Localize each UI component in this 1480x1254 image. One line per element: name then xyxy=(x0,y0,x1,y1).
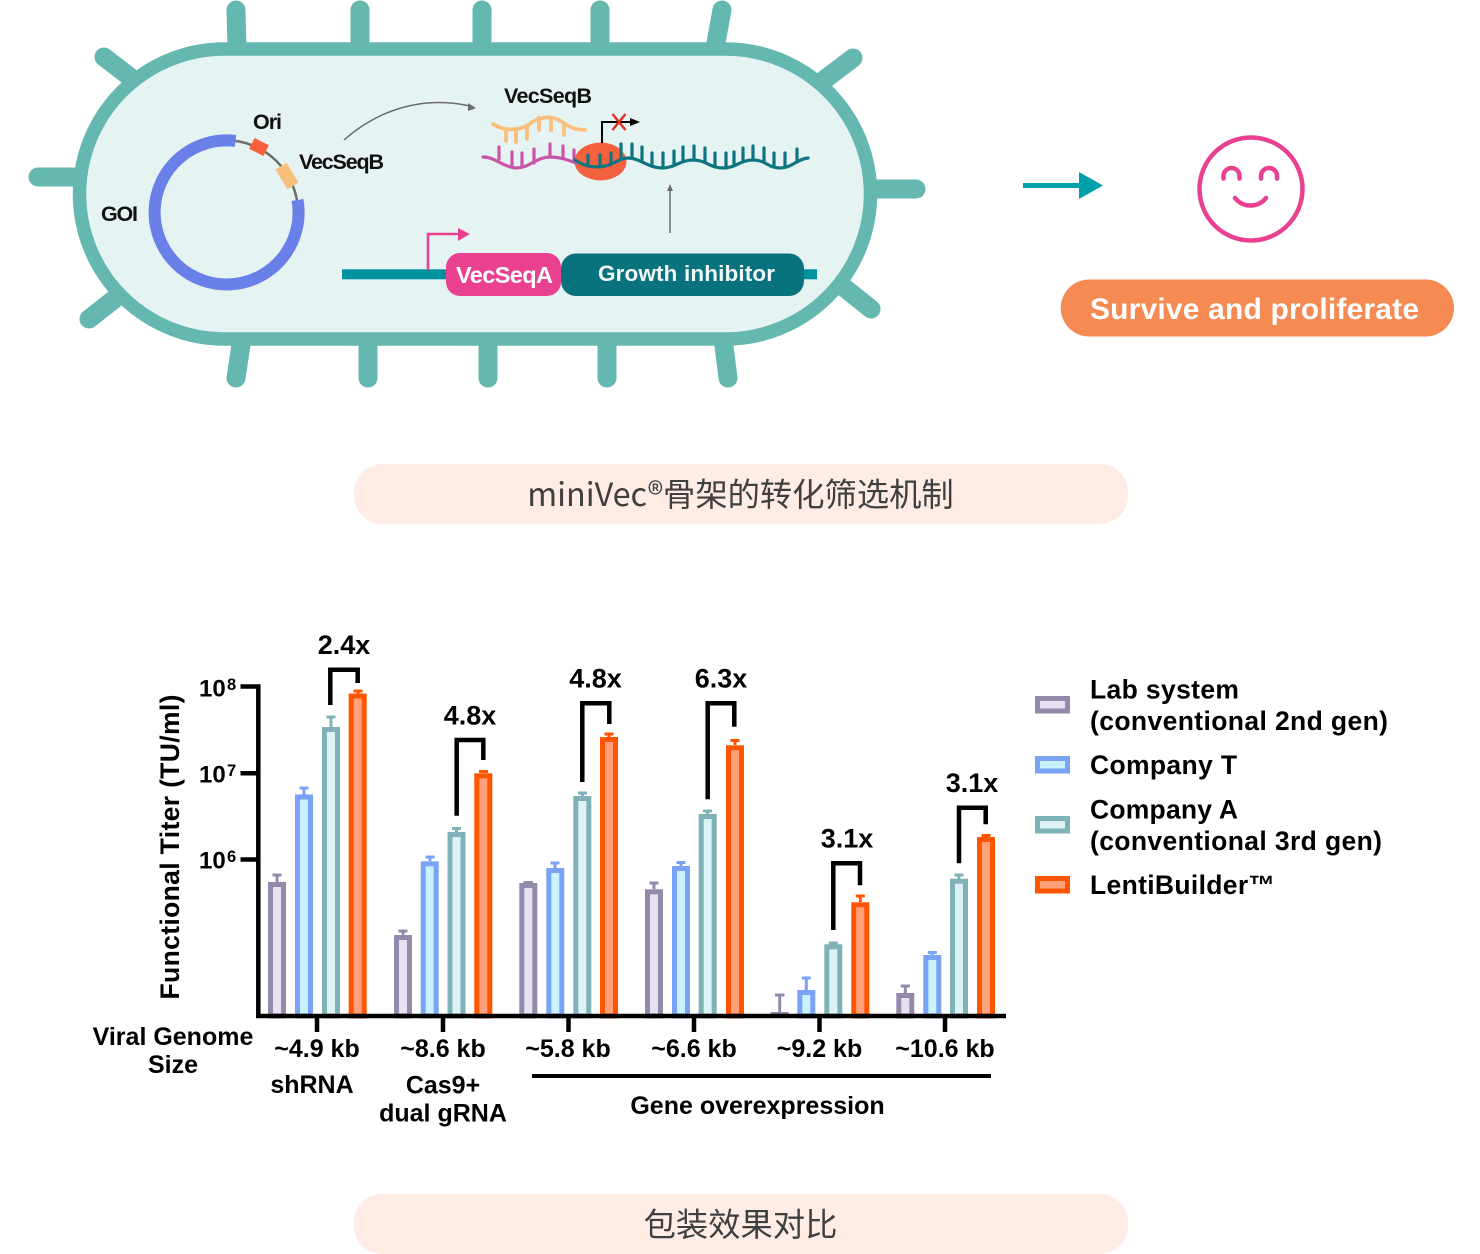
Growth inhibitor box: Growth inhibitor xyxy=(598,261,775,286)
fold-change labels: 3.1x xyxy=(946,768,998,798)
VecSeqA box: VecSeqA xyxy=(456,262,553,288)
fold-change labels: 2.4x xyxy=(318,630,370,660)
y axis title: Functional Titer (TU/ml) xyxy=(155,694,185,1000)
y axis tick labels: 7 xyxy=(227,762,236,780)
caption: mechanism: miniVec®骨架的转化筛选机制 xyxy=(527,470,954,516)
black promoter arrow xyxy=(602,118,640,143)
label: Ori: Ori xyxy=(253,110,282,134)
y axis tick labels: 10 xyxy=(199,762,226,788)
genome size labels: ~6.6 kb xyxy=(651,1035,737,1063)
pink promoter arrow xyxy=(428,228,470,270)
legend item: LentiBuilder: LentiBuilder™ xyxy=(1090,870,1275,900)
fold-change labels: 4.8x xyxy=(569,664,622,694)
genome size labels: ~4.9 kb xyxy=(274,1035,360,1063)
Growth inhibitor box xyxy=(561,254,804,296)
y axis tick labels xyxy=(199,676,236,874)
y axis tick labels: 10 xyxy=(199,676,226,702)
genome size labels: ~8.6 kb xyxy=(400,1035,486,1063)
label: VecSeqB on RNA: VecSeqB xyxy=(504,84,592,108)
caption: mechanism xyxy=(354,464,1128,524)
teal mRNA strand xyxy=(575,144,808,168)
arrow: cell to outcome xyxy=(1023,172,1103,199)
fold-change labels: 3.1x xyxy=(821,824,873,854)
legend xyxy=(1038,674,1388,900)
bar chart: packaging titers xyxy=(93,630,1006,1128)
label: Cas9 dual gRNA xyxy=(379,1072,507,1128)
caption: packaging comparison xyxy=(354,1194,1128,1254)
label: Cas9 dual gRNA: Cas9+ xyxy=(406,1072,480,1100)
x axis row title: Size xyxy=(148,1051,198,1079)
red ribosome ellipse xyxy=(574,142,626,180)
group: ~5.8 kb xyxy=(522,734,616,1016)
genome size labels: ~5.8 kb xyxy=(525,1035,611,1063)
y axis tick labels: 8 xyxy=(227,676,236,694)
label: Gene overexpression: Gene overexpression xyxy=(630,1092,885,1120)
fold-change labels: 6.3x xyxy=(695,664,747,694)
badge: Survive and proliferate: Survive and proliferate xyxy=(1090,293,1419,326)
chart axes and ticks xyxy=(240,686,1006,1032)
group: ~6.6 kb xyxy=(648,740,742,1016)
fold-change labels: 4.8x xyxy=(444,700,496,730)
group: ~9.2 kb xyxy=(771,896,867,1016)
label: shRNA: shRNA xyxy=(270,1071,354,1099)
label: GOI: GOI xyxy=(101,202,138,226)
y axis tick labels: 6 xyxy=(227,848,236,866)
icon: smiling face xyxy=(1200,138,1302,240)
legend item: Lab system: (conventional 2nd gen) xyxy=(1090,706,1388,736)
genome size labels: ~10.6 kb xyxy=(895,1035,995,1063)
group: ~4.9 kb xyxy=(270,691,364,1016)
comparison brackets xyxy=(330,670,986,930)
fold-change labels xyxy=(318,630,998,854)
badge: Survive and proliferate xyxy=(1061,280,1454,336)
DNA line xyxy=(342,269,817,279)
bacterium surface spikes xyxy=(38,10,916,378)
legend item: Company A xyxy=(1038,794,1382,856)
group: ~8.6 kb xyxy=(396,772,490,1016)
panel: bacterium mechanism diagram xyxy=(38,10,916,378)
arrow: up to mRNA xyxy=(667,184,673,233)
caption: packaging comparison: 包装效果对比 xyxy=(644,1200,837,1246)
x axis row title: Viral Genome xyxy=(93,1023,253,1051)
x axis row title xyxy=(93,1023,253,1079)
legend item: Company A: (conventional 3rd gen) xyxy=(1090,826,1382,856)
arrow: VecSeqB to transcript xyxy=(344,103,476,140)
label: VecSeqB on plasmid: VecSeqB xyxy=(299,150,384,174)
genome size labels: ~9.2 kb xyxy=(777,1035,862,1063)
legend item: Company T: Company T xyxy=(1090,750,1237,780)
legend item: Company A: Company A xyxy=(1090,794,1238,824)
bacterium cell body xyxy=(80,49,870,339)
legend item: Lab system xyxy=(1038,674,1388,736)
red cross blocked transcription xyxy=(612,114,626,130)
plasmid xyxy=(153,138,299,285)
VecSeqB RNA strand xyxy=(493,117,585,142)
pink mRNA strand xyxy=(483,144,576,168)
group: ~10.6 kb xyxy=(899,836,992,1016)
label: Cas9 dual gRNA: dual gRNA xyxy=(379,1100,507,1128)
gene overexpression group line xyxy=(532,1074,991,1078)
y axis tick labels: 10 xyxy=(199,848,226,874)
genome size labels xyxy=(274,1035,995,1063)
legend item: Lab system: Lab system xyxy=(1090,674,1239,704)
VecSeqA box xyxy=(446,253,561,296)
